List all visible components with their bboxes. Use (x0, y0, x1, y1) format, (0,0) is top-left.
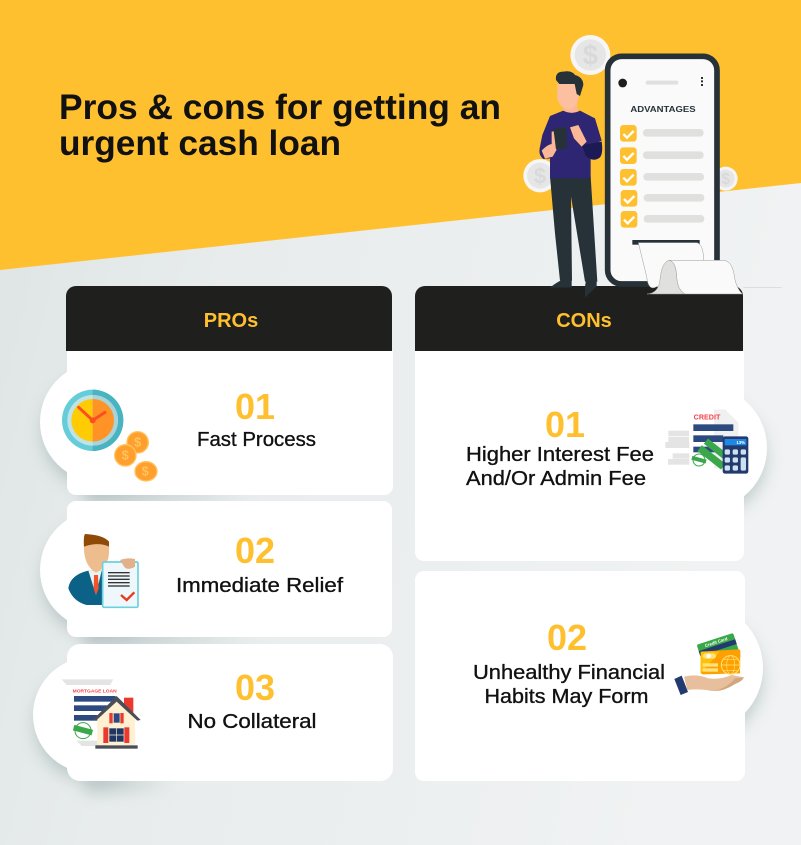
card: 01 Fast Process: 01 (235, 386, 275, 427)
illustration: person with phone checklist (539, 56, 782, 297)
card: 03 No Collateral: 03 (235, 667, 275, 708)
icon: mortgage loan house: MORTGAGE LOAN (73, 689, 117, 695)
title (59, 88, 501, 163)
checklist (620, 125, 704, 228)
heading: CONs: CONs (556, 310, 612, 332)
icon: hand holding cards (674, 633, 744, 695)
heading: PROs (66, 286, 392, 351)
card: 02 Unhealthy Financial Habits (415, 571, 763, 781)
card: 01 Fast Process: Fast Process (197, 428, 316, 451)
title: urgent cash loan (59, 124, 341, 163)
shadows under cards (35, 374, 766, 792)
icon: credit calculator: 13% (736, 440, 745, 445)
icon: credit calculator (665, 409, 748, 474)
icon: coins (523, 35, 738, 192)
text: label (473, 661, 665, 708)
card: 03 No Collateral: No Collateral (188, 710, 316, 733)
card: 02 Unhealthy Financial Habits: 02 (547, 617, 587, 658)
icon: receipt (632, 240, 782, 294)
icon: clock and coins: $ (134, 436, 141, 450)
icon: mortgage loan house (62, 679, 141, 749)
panel: PROs (33, 286, 393, 781)
icon: coins: $ (583, 40, 598, 71)
card: 01 Higher Interest Fee: 01 (545, 404, 585, 445)
card: 01 Higher Interest Fee (415, 351, 767, 561)
title: Pros & cons for getting an (59, 88, 501, 127)
icon: credit calculator: CREDIT (694, 412, 721, 421)
card: 02 Immediate Relief: 02 (235, 530, 275, 571)
icon: hand holding cards: Credit Card (704, 636, 728, 648)
icon: clock and coins: $ (142, 464, 149, 478)
text: label: And/Or Admin Fee (466, 467, 646, 490)
icon: coins: $ (721, 171, 730, 188)
icon: clock and coins: $ (122, 449, 129, 463)
heading: PROs: PROs (204, 310, 258, 332)
card: 02 Immediate Relief: Immediate Relief (176, 574, 343, 597)
text: label: Higher Interest Fee (466, 443, 654, 466)
panel: CONs (415, 286, 767, 781)
icon: coins: $ (534, 164, 546, 189)
heading: CONs (415, 286, 743, 351)
person (539, 71, 602, 297)
icon: man with document (68, 534, 138, 607)
icon: clock and coins (62, 390, 157, 481)
icon: phone (608, 56, 717, 284)
card: 03 No Collateral (33, 644, 393, 781)
text: label: Habits May Form (484, 685, 648, 708)
card: 02 Immediate Relief (40, 501, 392, 637)
text: label: Unhealthy Financial (473, 661, 665, 684)
icon: phone: ADVANTAGES (630, 105, 696, 114)
text: label (466, 443, 654, 490)
card: 01 Fast Process (40, 351, 393, 495)
